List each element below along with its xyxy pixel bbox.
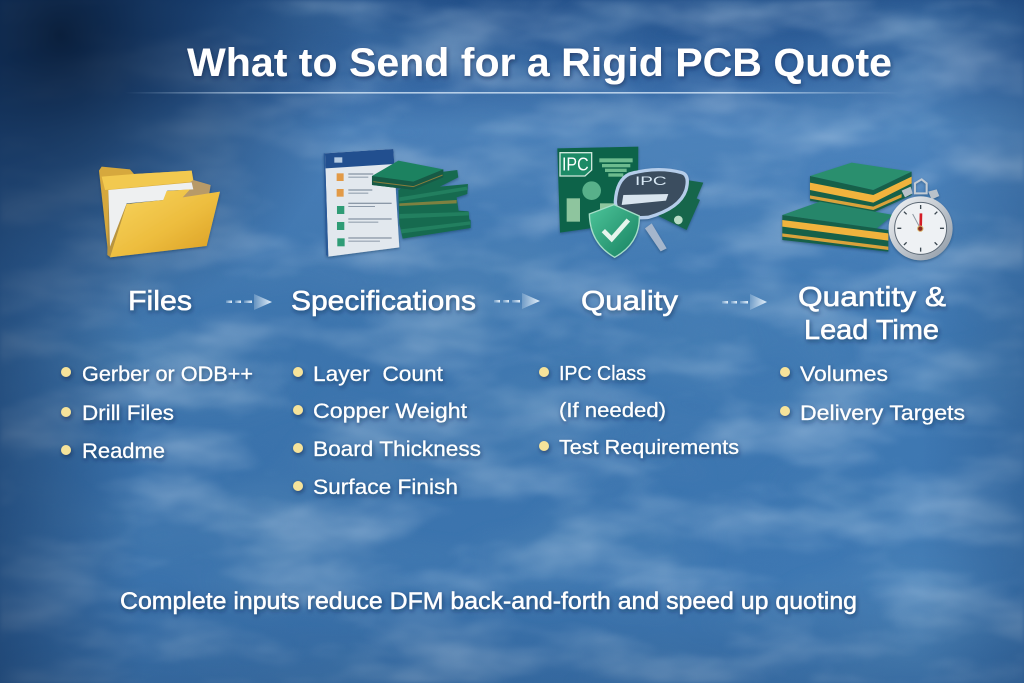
list: files [61, 362, 253, 463]
icon: PCB stack and stopwatch [782, 163, 953, 260]
arrow: files to specifications [226, 294, 272, 310]
heading: Specifications: Specifications [291, 285, 476, 316]
list: quantity and lead time [780, 362, 965, 425]
heading: Quantity and Lead Time: Lead Time [804, 314, 939, 345]
list: specifications: Board Thickness [313, 437, 481, 461]
heading: Quality: Quality [581, 285, 678, 316]
list: specifications: Layer Count [313, 362, 443, 386]
icon: specifications checklist and PCB stack [324, 149, 471, 257]
icon: quality IPC board, magnifier and shield: IPC [562, 154, 589, 175]
list: files: Drill Files [82, 401, 174, 425]
footer note: Complete inputs reduce DFM back-and-forth and speed up quoting [120, 588, 857, 615]
list: files: Readme [82, 439, 165, 463]
list: quantity and lead time: Delivery Targets [800, 401, 965, 425]
list: files: Gerber or ODB++ [82, 362, 253, 386]
list: quality [539, 362, 739, 459]
arrow: quality to quantity [722, 294, 767, 310]
list: quality: IPC Class [559, 362, 646, 385]
heading: Quantity and Lead Time [798, 281, 946, 345]
list: quality: (If needed) [559, 399, 666, 422]
list: quantity and lead time: Volumes [800, 362, 888, 386]
arrow: specifications to quality [494, 293, 540, 309]
list: quality: Test Requirements [559, 436, 739, 459]
list: specifications [293, 362, 481, 499]
icon: folder [99, 167, 220, 257]
icon: quality IPC board, magnifier and shield: IPC [635, 174, 667, 188]
title: What to Send for a Rigid PCB Quote [187, 41, 892, 85]
heading: Quantity and Lead Time: Quantity & [798, 281, 946, 312]
list: specifications: Copper Weight [313, 399, 467, 423]
icon: quality IPC board, magnifier and shield [557, 147, 703, 257]
heading: Files: Files [128, 285, 192, 316]
list: specifications: Surface Finish [313, 475, 458, 499]
